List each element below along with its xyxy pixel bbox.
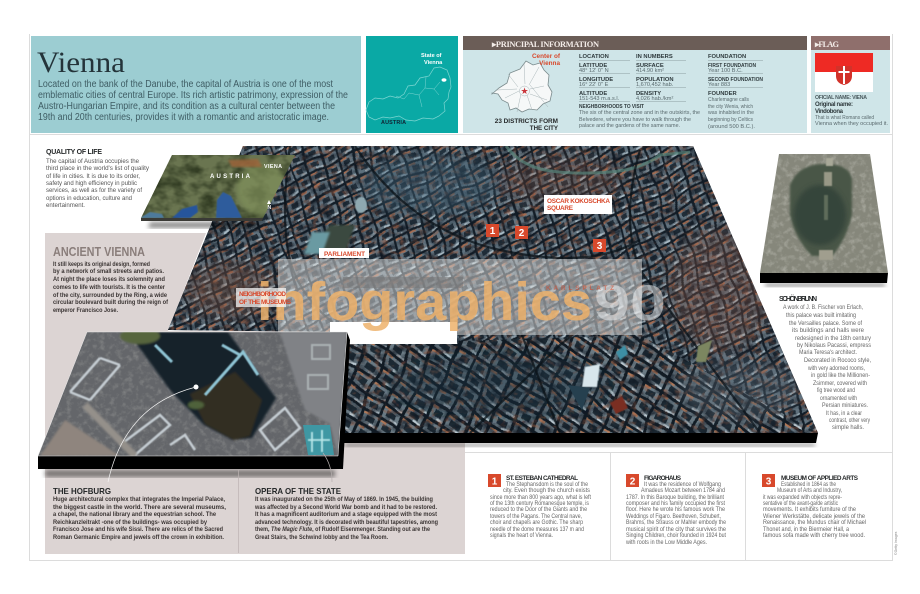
The Hofburg text: a chapel, the national library and the equestrian school. The <box>53 511 217 518</box>
Ancient Vienna text: emperor Francisco Jose. <box>53 307 118 314</box>
Opera of the State text: was affected by a Second World War bomb and it had to be restored. <box>254 504 437 511</box>
label: state of Vienna <box>421 53 443 66</box>
Ancient Vienna text: ANCIENT VIENNA <box>53 245 145 259</box>
The Hofburg text: the biggest castle in the world. There are several museums, <box>53 504 226 511</box>
aerial map: central Vienna <box>140 120 850 460</box>
marker 3: 3 <box>597 241 603 252</box>
label: Austria: AUSTRIA <box>381 120 406 126</box>
label: state of Vienna: State of <box>421 53 442 59</box>
number 2: 2 <box>630 476 636 488</box>
panel: Museum of Applied Arts: Renaissance, the Mundus chair of Michael <box>763 520 866 526</box>
left palace blocks <box>70 358 300 455</box>
Belvedere white building <box>582 364 600 387</box>
column: in numbers: IN NUMBERS <box>636 54 673 60</box>
panel: Figarohaus: Amadeus Mozart between 1784 and <box>641 488 725 494</box>
Schönbrunn text: Zsimmer, covered with <box>813 381 867 387</box>
panel: Figarohaus: Weddings of Figaro. Beethoven, Schubert, <box>626 514 721 520</box>
north arrow: N <box>268 205 272 211</box>
introduction text: Located on the bank of the Danube, the capital of Austria is one of the most <box>38 79 333 90</box>
label: state of Vienna: Vienna <box>424 60 443 66</box>
panel: Figarohaus: It was the residence of Wolfgang <box>644 482 721 488</box>
column: in numbers: SURFACE <box>636 63 664 69</box>
central axis <box>824 172 832 186</box>
label: Neighborhood of the Museums: OF THE MUSEUMS <box>239 299 292 306</box>
quality of life text: The capital of Austria occupies the <box>46 158 139 165</box>
panel: Figarohaus: 1787. In this Baroque building, the brilliant <box>626 495 724 501</box>
flag text: Vindobona <box>815 109 844 115</box>
Schönbrunn text: this palace was built imitating <box>786 313 856 319</box>
panel: Museum of Applied Arts: Thonet and, in the Biermeier Hall, a <box>763 527 850 533</box>
marker 1 <box>486 224 499 237</box>
Schönbrunn text: It has, in a clear <box>826 411 862 417</box>
Ancient Vienna text: It still keeps its original design, formed <box>53 261 150 268</box>
panel: St. Esteban Cathedral: of the 13th century Romanesque temple, is <box>490 501 589 507</box>
label: Karlsplatz: KARLSPLATZ <box>546 285 614 292</box>
Opera of the State text <box>254 487 438 541</box>
Opera of the State text: OPERA OF THE STATE <box>255 487 342 496</box>
column: foundation: Year 100 B.C. <box>708 68 743 74</box>
label: 23 districts: 23 DISTRICTS FORM <box>495 118 558 125</box>
quality of life text: QUALITY OF LIFE <box>46 149 102 156</box>
label: center of Vienna: Vienna <box>539 60 560 67</box>
map labels <box>236 195 614 307</box>
panel: Museum of Applied Arts: MUSEUM OF APPLIED ARTS <box>781 475 859 482</box>
quality of life text: third place in the world's list of quality <box>46 165 150 172</box>
panel: Figarohaus: musical spirit of the city that survives the <box>626 527 727 533</box>
panel: St. Esteban Cathedral: towers of the Pagans. The Central nave, <box>490 514 582 520</box>
The Hofburg text: Reichkanzleitrakt -one of the buildings- was occupied by <box>53 519 208 526</box>
label: Oscar Kokoschka Square <box>544 195 612 214</box>
Opera of the State text: It was inaugurated on the 25th of May of 1869. In 1945, the building <box>255 496 433 503</box>
panel: Museum of Applied Arts: sentative of the avant-garde artistic <box>763 501 838 507</box>
column: location: 48° 12' 0'' N <box>579 68 609 74</box>
Schönbrunn text: Persian miniatures. <box>822 403 868 409</box>
The Hofburg text: Francisco Jose and his wife Sissi. There are relics of the Sacred <box>53 526 223 533</box>
aerial map: Hofburg <box>36 328 350 477</box>
quality of life text: options in education, culture and <box>46 195 132 202</box>
panel: St. Esteban Cathedral: ST. ESTEBAN CATHEDRAL <box>506 475 578 482</box>
label: Parliament <box>319 248 369 258</box>
marker 3 <box>593 239 606 252</box>
label: Oscar Kokoschka Square: OSCAR KOKOSCHKA <box>547 198 610 205</box>
main roads <box>285 146 760 433</box>
panel: Figarohaus: Brahms, the Strauss or Mahler embody the <box>626 520 727 526</box>
flag heading: ▸FLAG <box>814 40 839 49</box>
label: center of Vienna: Center of <box>532 53 561 60</box>
column: in numbers: POPULATION <box>636 77 674 83</box>
column: foundation: was inhabited in the <box>707 110 754 116</box>
column: location: ALTITUDE <box>579 91 607 97</box>
column: in numbers: 4,026 hab./km² <box>636 96 673 102</box>
panel: Austria locator map <box>366 36 458 133</box>
column: foundation: Year 883 <box>708 82 730 88</box>
column: foundation: FOUNDER <box>708 91 737 97</box>
The Hofburg text <box>53 487 226 541</box>
Ancient Vienna text: by a network of small streets and patios. <box>53 268 164 275</box>
panel: principal information <box>463 36 807 133</box>
label: Neighborhood of the Museums <box>236 288 292 307</box>
Ancient Vienna text: of the city, surrounded by the Ring, a wide <box>53 292 168 299</box>
introduction text <box>38 79 348 123</box>
panel: Figarohaus: Singing Children, choir founded in 1924 but <box>626 533 726 539</box>
panel: Figarohaus: FIGAROHAUS <box>644 475 682 482</box>
column: foundation: FIRST FOUNDATION <box>708 63 756 69</box>
panel: Museum of Applied Arts: movements. It exhibits furniture of the <box>763 507 857 513</box>
neighborhoods to visit: palace and the gardens of the same name. <box>579 123 680 129</box>
marker 1: 1 <box>490 226 496 237</box>
number 3: 3 <box>766 476 772 488</box>
panel: St. Esteban Cathedral: reduced to the Door of the Giants and the <box>490 507 588 513</box>
marker 2: 2 <box>519 228 525 239</box>
column: location: LONGITUDE <box>579 77 613 83</box>
column: in numbers: 414.90 km² <box>636 68 664 74</box>
panel: Museum of Applied Arts: Wiener Werkstätte, delicate jewels of the <box>763 514 866 520</box>
column: foundation: (around 500 B.C.). <box>708 124 755 130</box>
right blocks <box>280 332 347 456</box>
panel: Figarohaus: composer and his family occupied the first <box>626 501 725 507</box>
heading: ▸PRINCIPAL INFORMATION <box>491 40 599 49</box>
Schönbrunn text: simple halls. <box>832 425 864 431</box>
Schönbrunn text: in gold like the Millionen- <box>811 373 870 379</box>
neighborhoods to visit: The six of the central zone and in the outskirts, the <box>579 110 700 116</box>
Vienna marker <box>442 78 446 82</box>
church dome <box>355 197 367 213</box>
label: Oscar Kokoschka Square: SQUARE <box>547 205 574 212</box>
introduction text: emblematic cities of central Europe. Its rich artistic patrimony, expression of the <box>38 90 348 101</box>
flag of Vienna <box>815 53 873 92</box>
column: in numbers: DENSITY <box>636 91 661 97</box>
flag text <box>815 95 888 127</box>
panel: St. Esteban Cathedral: needle of the dome measures 137 m and <box>490 527 584 533</box>
Schönbrunn text: fig tree wood and <box>817 388 855 394</box>
Opera of the State text: advanced technology. It is decorated with beautiful tapestries, among <box>255 519 438 526</box>
column: location: 151-543 m.a.s.l. <box>579 96 620 102</box>
The Hofburg text: Roman Germanic Empire and jewels off the crown in exhibition. <box>53 534 224 541</box>
panel: St. Esteban Cathedral <box>488 474 591 539</box>
panel: St. Esteban Cathedral: The Stephansdom is the soul of the <box>506 482 589 488</box>
Ancient Vienna text <box>53 245 169 314</box>
The Hofburg text: Huge architectural complex that integrates the Imperial Palace, <box>53 496 225 503</box>
Schönbrunn text: A work of J. B. Fischer von Erlach, <box>783 305 863 311</box>
introduction text: Austro-Hungarian Empire, and its condition as a cultural center between the <box>38 101 335 112</box>
marker 2 <box>515 226 528 239</box>
column: location: LATITUDE <box>579 63 607 69</box>
Opera of the State text: Great Stairs, the Schwind lobby and the Tea Room. <box>255 534 388 541</box>
label: center of Vienna <box>532 53 561 67</box>
Vienna label: VIENA <box>264 164 282 170</box>
flag text: OFICIAL NAME: VIENA <box>815 95 867 101</box>
districts map <box>492 61 552 112</box>
divider between monuments <box>238 470 240 553</box>
label: 23 districts <box>495 118 559 132</box>
panel: flag <box>811 36 890 133</box>
Schönbrunn text: SCHÖNBRUNN <box>779 294 817 303</box>
north arrow <box>267 200 272 211</box>
panel: Museum of Applied Arts: Museum of Arts and Industry, <box>777 488 842 494</box>
panel: St. Esteban Cathedral: since more than 800 years ago, what is left <box>490 495 591 501</box>
Austria outline <box>366 67 451 121</box>
watermark <box>257 259 666 344</box>
panel: St. Esteban Cathedral: choir and chapels are Gothic. The sharp <box>490 520 584 526</box>
flag text: That is what Romans called <box>815 115 874 121</box>
panel: St. Esteban Cathedral: city. Even though the church exists <box>503 488 590 494</box>
Schönbrunn text: redesigned in the 18th century <box>795 336 871 342</box>
column: foundation: SECOND FOUNDATION <box>708 77 763 83</box>
opera building <box>303 425 334 455</box>
column: foundation: Charlemagne calls <box>708 97 749 103</box>
column: foundation: the city Wenia, which <box>708 104 753 110</box>
neighborhoods to visit: NEIGHBORHOODS TO VISIT <box>579 104 644 110</box>
column: foundation: FOUNDATION <box>708 54 746 60</box>
column: foundation <box>707 54 763 130</box>
number 1: 1 <box>492 476 498 488</box>
panel: title and introduction <box>31 36 361 133</box>
parliament gardens <box>324 224 356 248</box>
Schönbrunn text: its buildings and halls were <box>792 328 865 334</box>
quality of life text: entertainment. <box>46 202 85 209</box>
panel: St. Esteban Cathedral: signals the heart of Vienna. <box>490 533 553 539</box>
Schönbrunn text: Decorated in Rococo style, <box>804 358 871 364</box>
red block <box>610 396 628 414</box>
quality of life text <box>46 149 150 209</box>
panel: grey background for Ancient Vienna and monuments <box>45 233 465 554</box>
watermark: 90 <box>594 275 666 331</box>
column: in numbers <box>636 54 686 102</box>
Ancient Vienna text: comes to life with tourists. It is the center <box>53 284 166 291</box>
quality of life text: of life in cities. It is due to its order, <box>46 173 140 180</box>
label: 23 districts: THE CITY <box>530 125 559 132</box>
label: Parliament: PARLIAMENT <box>324 251 365 258</box>
column: location: 16° 22' 0'' E <box>579 82 609 88</box>
panel: Museum of Applied Arts: it was expanded with objects repre- <box>763 495 842 501</box>
callout lines <box>108 387 332 482</box>
Schönbrunn text: the Versailles palace. Some of <box>789 321 862 327</box>
Opera of the State text: them, The Magic Flute, of Rudolf Eisenmenger. Standing out are the <box>255 526 430 533</box>
quality of life text: safety and high efficiency in public <box>46 180 138 187</box>
quality of life text: services, as well as for the variety of <box>46 187 142 194</box>
introduction text: 19th and 20th centuries, provides it with a romantic and aristocratic image. <box>38 112 329 123</box>
center star: ★ <box>520 86 529 96</box>
flag text: Vienna when they occupied it. <box>815 121 888 127</box>
panel: Museum of Applied Arts: famous sofa made with cherry tree wood. <box>763 533 865 539</box>
column: location: LOCATION <box>579 54 609 60</box>
Austria label: AUSTRIA <box>210 174 251 180</box>
Schönbrunn text: Maria Teresa's architect. <box>799 350 857 356</box>
museum block <box>616 345 628 360</box>
title: Vienna <box>37 46 125 79</box>
neighborhoods to visit <box>579 104 700 129</box>
column: foundation: beginning by Celtics <box>708 117 753 123</box>
The Hofburg text: THE HOFBURG <box>53 487 111 496</box>
Ancient Vienna text: circular boulevard built during the reign of <box>53 299 169 306</box>
panel: Figarohaus <box>625 474 727 546</box>
tone patches <box>185 155 800 420</box>
aerial map: Austria <box>140 154 296 228</box>
watermark: infographics <box>257 272 592 332</box>
Opera of the State text: It has a magnificent auditorium and a stage equipped with the most <box>255 511 437 518</box>
Schönbrunn text <box>779 294 871 431</box>
Schönbrunn text: contrast, other very <box>829 418 870 424</box>
Ancient Vienna text: At night the place loses its solemnity and <box>53 276 165 283</box>
panel: Museum of Applied Arts: Established in 1864 as the <box>781 482 837 488</box>
dark gardens <box>120 328 276 440</box>
Schönbrunn text: ornamented with <box>820 396 857 402</box>
column: location <box>579 54 630 102</box>
flag text: Original name: <box>815 102 853 108</box>
Schönbrunn text: by Nikolaus Pacassi, empress <box>797 343 871 349</box>
panel: Museum of Applied Arts <box>762 474 866 539</box>
Hofburg wings <box>155 345 258 395</box>
column: in numbers: 1,670,452 hab. <box>636 82 674 88</box>
neighborhoods to visit: Belvedere, where you have to walk through the <box>579 117 691 123</box>
label: Neighborhood of the Museums: NEIGHBORHOOD <box>239 291 286 298</box>
aerial map: Schönbrunn <box>758 153 890 287</box>
Schönbrunn text: with very adorned rooms, <box>807 366 865 372</box>
credit: ©Getty Images <box>894 531 898 555</box>
panel: Figarohaus: floor. Here he wrote his famous work The <box>626 507 726 513</box>
canal <box>506 146 690 173</box>
palace gardens <box>790 164 852 256</box>
panel: Figarohaus: with roots in the Low Middle Ages. <box>625 540 707 546</box>
